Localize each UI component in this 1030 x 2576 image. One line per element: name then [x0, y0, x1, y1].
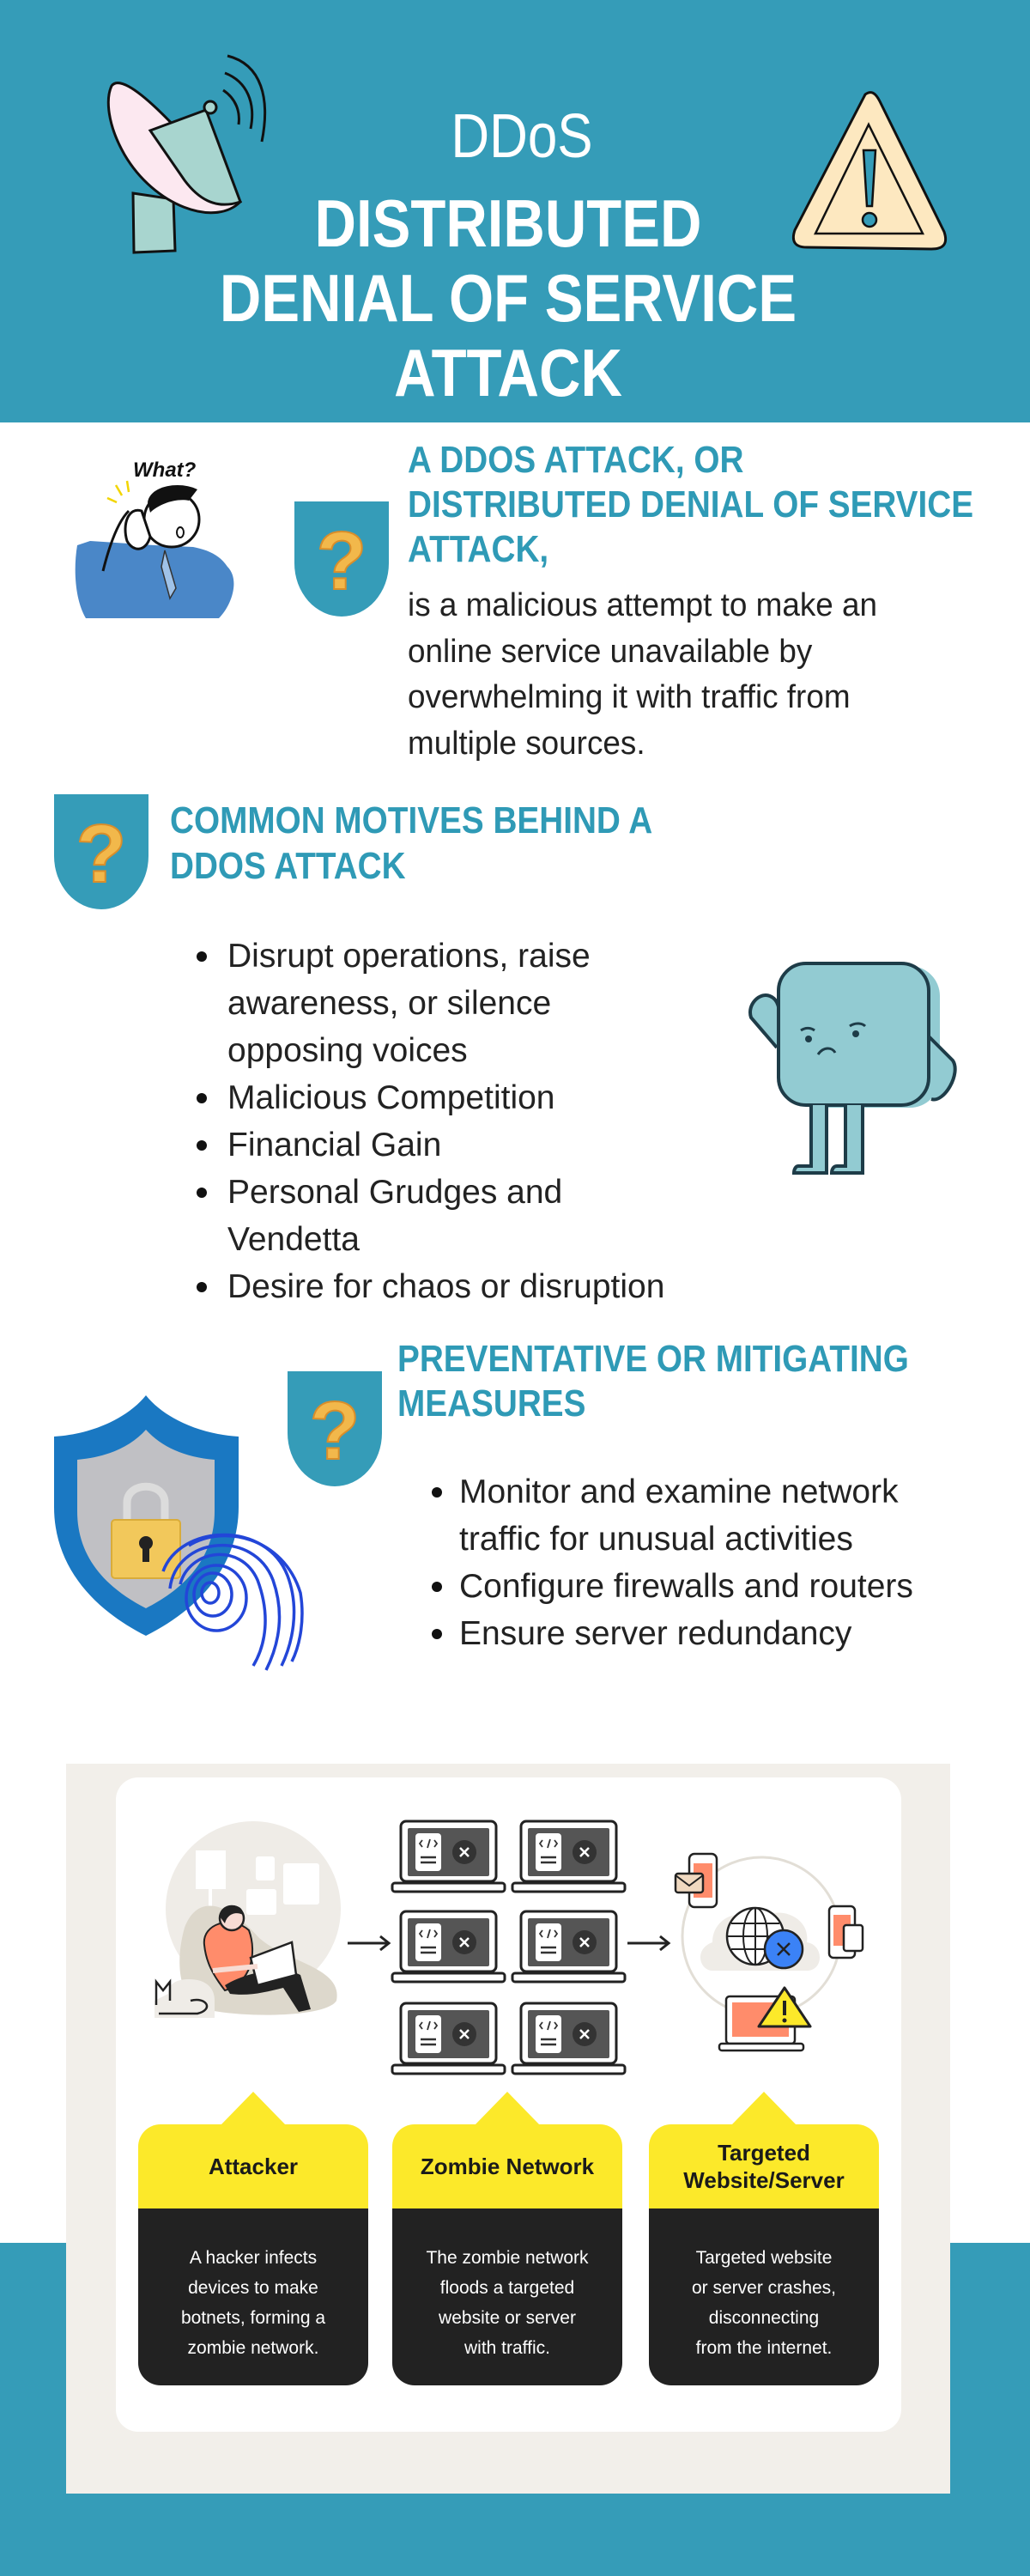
header band	[0, 0, 1030, 422]
bullet list: traffic for unusual activities	[459, 1521, 853, 1558]
bullet list: Vendetta	[227, 1221, 360, 1258]
heading	[397, 1338, 909, 1425]
title: DDoS	[451, 102, 593, 171]
panel: how a ddos attack works	[66, 1764, 950, 2494]
icon: satellite dish	[106, 55, 266, 254]
icon: confused man: What?	[133, 459, 197, 482]
callout: targeted website: Targeted website	[696, 2248, 832, 2268]
bullet list: Personal Grudges and	[227, 1174, 562, 1211]
bullet list: Monitor and examine network	[459, 1473, 899, 1510]
callout: targeted website: Targeted	[718, 2140, 810, 2166]
callout: targeted website: from the internet.	[696, 2338, 832, 2358]
bullet list	[197, 938, 664, 1305]
text block: is a malicious attempt to make an	[408, 587, 877, 623]
heading: ATTACK,	[408, 528, 548, 570]
heading: A DDOS ATTACK, OR	[408, 439, 743, 481]
heading: DDOS ATTACK	[170, 845, 406, 887]
callout: attacker: A hacker infects	[190, 2248, 317, 2268]
title: DENIAL OF SERVICE	[220, 260, 797, 336]
icon: question shield	[294, 501, 389, 617]
section: common motives	[54, 794, 957, 1305]
callout: attacker: Attacker	[209, 2154, 298, 2179]
callout: zombie network: website or server	[439, 2308, 576, 2328]
bullet list	[432, 1473, 913, 1652]
bullet list: Disrupt operations, raise	[227, 938, 591, 975]
icon: question shield	[288, 1371, 382, 1486]
bullet list: opposing voices	[227, 1032, 468, 1069]
callout: zombie network: with traffic.	[464, 2338, 550, 2358]
icon: warning triangle	[791, 91, 948, 251]
bullet list: Configure firewalls and routers	[459, 1568, 913, 1605]
heading: PREVENTATIVE OR MITIGATING	[397, 1338, 909, 1380]
callout: attacker: devices to make	[188, 2278, 318, 2298]
callout: targeted website: or server crashes,	[692, 2278, 836, 2298]
card	[116, 1777, 901, 2432]
icon: question shield: ?	[310, 1385, 360, 1477]
section: preventative measures	[54, 1338, 913, 1671]
heading	[170, 799, 652, 887]
title: ATTACK	[394, 335, 622, 410]
section: what is ddos	[294, 439, 973, 761]
callout: targeted website: Website/Server	[683, 2167, 845, 2193]
bullet list: Ensure server redundancy	[459, 1615, 851, 1652]
callout: zombie network: The zombie network	[426, 2248, 589, 2268]
icon: shield with lock and fingerprint	[54, 1395, 304, 1671]
callout: attacker: botnets, forming a	[181, 2308, 325, 2328]
heading	[408, 439, 973, 570]
icon: confused block character	[748, 962, 957, 1175]
heading: DISTRIBUTED DENIAL OF SERVICE	[408, 483, 973, 526]
target scene	[676, 1854, 863, 2050]
callout: zombie network	[392, 2092, 622, 2385]
attacker scene	[154, 1821, 341, 2018]
bottom teal band	[0, 2243, 1030, 2576]
icon: question shield	[54, 794, 148, 909]
arrows	[348, 1936, 389, 1950]
heading: COMMON MOTIVES BEHIND A	[170, 799, 652, 841]
icon: question shield: ?	[76, 808, 126, 900]
icon: question shield: ?	[317, 515, 367, 607]
heading: MEASURES	[397, 1382, 585, 1425]
bullet list: Financial Gain	[227, 1127, 441, 1163]
icon: confused man	[76, 459, 233, 618]
callout: zombie network: Zombie Network	[421, 2154, 594, 2179]
text block: multiple sources.	[408, 725, 645, 761]
callout: attacker: zombie network.	[188, 2338, 318, 2358]
callout: zombie network: floods a targeted	[440, 2278, 574, 2298]
bullet list: awareness, or silence	[227, 985, 551, 1022]
text block: overwhelming it with traffic from	[408, 679, 851, 715]
callout: targeted website: disconnecting	[709, 2308, 819, 2328]
bullet list: Desire for chaos or disruption	[227, 1268, 664, 1305]
callout: attacker	[138, 2092, 368, 2385]
callout: targeted website	[649, 2092, 879, 2385]
text block	[408, 587, 877, 761]
title: DISTRIBUTED	[315, 185, 701, 261]
diagram: attacker to zombie network to target	[154, 1820, 863, 2075]
bullet list: Malicious Competition	[227, 1079, 554, 1116]
title	[220, 102, 797, 410]
text block: online service unavailable by	[408, 634, 812, 670]
